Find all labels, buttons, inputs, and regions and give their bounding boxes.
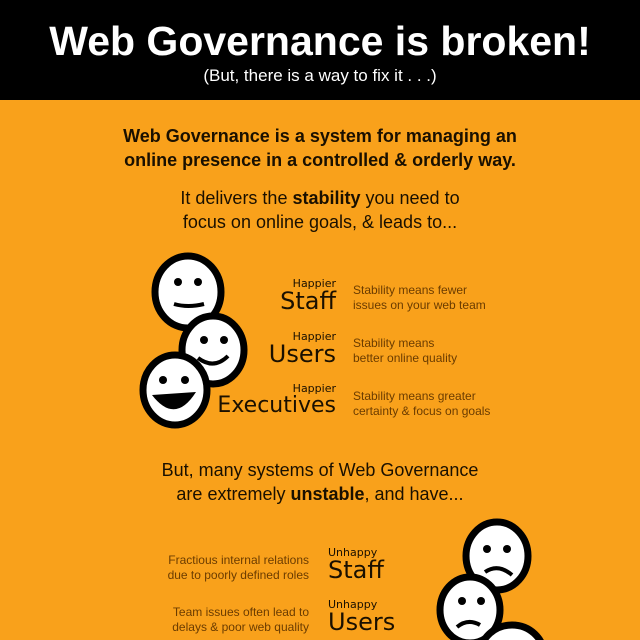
desc: unhappy staff: Fractious internal relations xyxy=(168,553,309,567)
desc: unhappy users: Team issues often lead to xyxy=(173,605,309,619)
unstable text xyxy=(162,460,478,504)
label: happier executives: Executives xyxy=(217,393,336,418)
desc: executives: certainty & focus on goals xyxy=(353,404,490,418)
label: happier staff: Happier xyxy=(293,277,336,290)
desc: executives: Stability means greater xyxy=(353,389,476,403)
desc: users xyxy=(353,336,457,365)
desc: staff: Stability means fewer xyxy=(353,283,467,297)
desc: unhappy staff xyxy=(168,553,309,582)
label: happier users: Happier xyxy=(293,330,336,343)
label: unhappy users: Unhappy xyxy=(328,598,377,611)
intro text xyxy=(123,126,517,170)
desc: executives xyxy=(353,389,490,418)
desc: users: better online quality xyxy=(353,351,457,365)
title: Web Governance is broken! xyxy=(49,18,591,64)
subtitle: (But, there is a way to fix it . . .) xyxy=(203,66,437,85)
desc: staff: issues on your web team xyxy=(353,298,486,312)
unstable text: But, many systems of Web Governance xyxy=(162,460,478,480)
desc: users: Stability means xyxy=(353,336,434,350)
unstable text: are extremely unstable, and have... xyxy=(176,484,464,504)
label: happier executives: Happier xyxy=(293,382,336,395)
label: unhappy staff: Unhappy xyxy=(328,546,377,559)
label: unhappy users: Users xyxy=(328,608,395,636)
desc: unhappy users xyxy=(172,605,309,634)
intro text: online presence in a controlled & orderly way. xyxy=(124,150,516,170)
intro text: Web Governance is a system for managing an xyxy=(123,126,517,146)
label: happier users: Users xyxy=(269,340,336,368)
happy faces xyxy=(140,252,248,428)
label: happier executives xyxy=(217,382,336,418)
stability text: focus on online goals, & leads to... xyxy=(183,212,457,232)
label: unhappy staff: Staff xyxy=(328,556,384,584)
desc: unhappy staff: due to poorly defined roles xyxy=(168,568,309,582)
desc: staff xyxy=(353,283,486,312)
stability text: It delivers the stability you need to xyxy=(180,188,460,208)
header bar xyxy=(0,0,640,100)
label: happier staff: Staff xyxy=(280,287,336,315)
sad faces xyxy=(436,518,544,640)
stability text xyxy=(180,188,460,232)
desc: unhappy users: delays & poor web quality xyxy=(172,620,309,634)
